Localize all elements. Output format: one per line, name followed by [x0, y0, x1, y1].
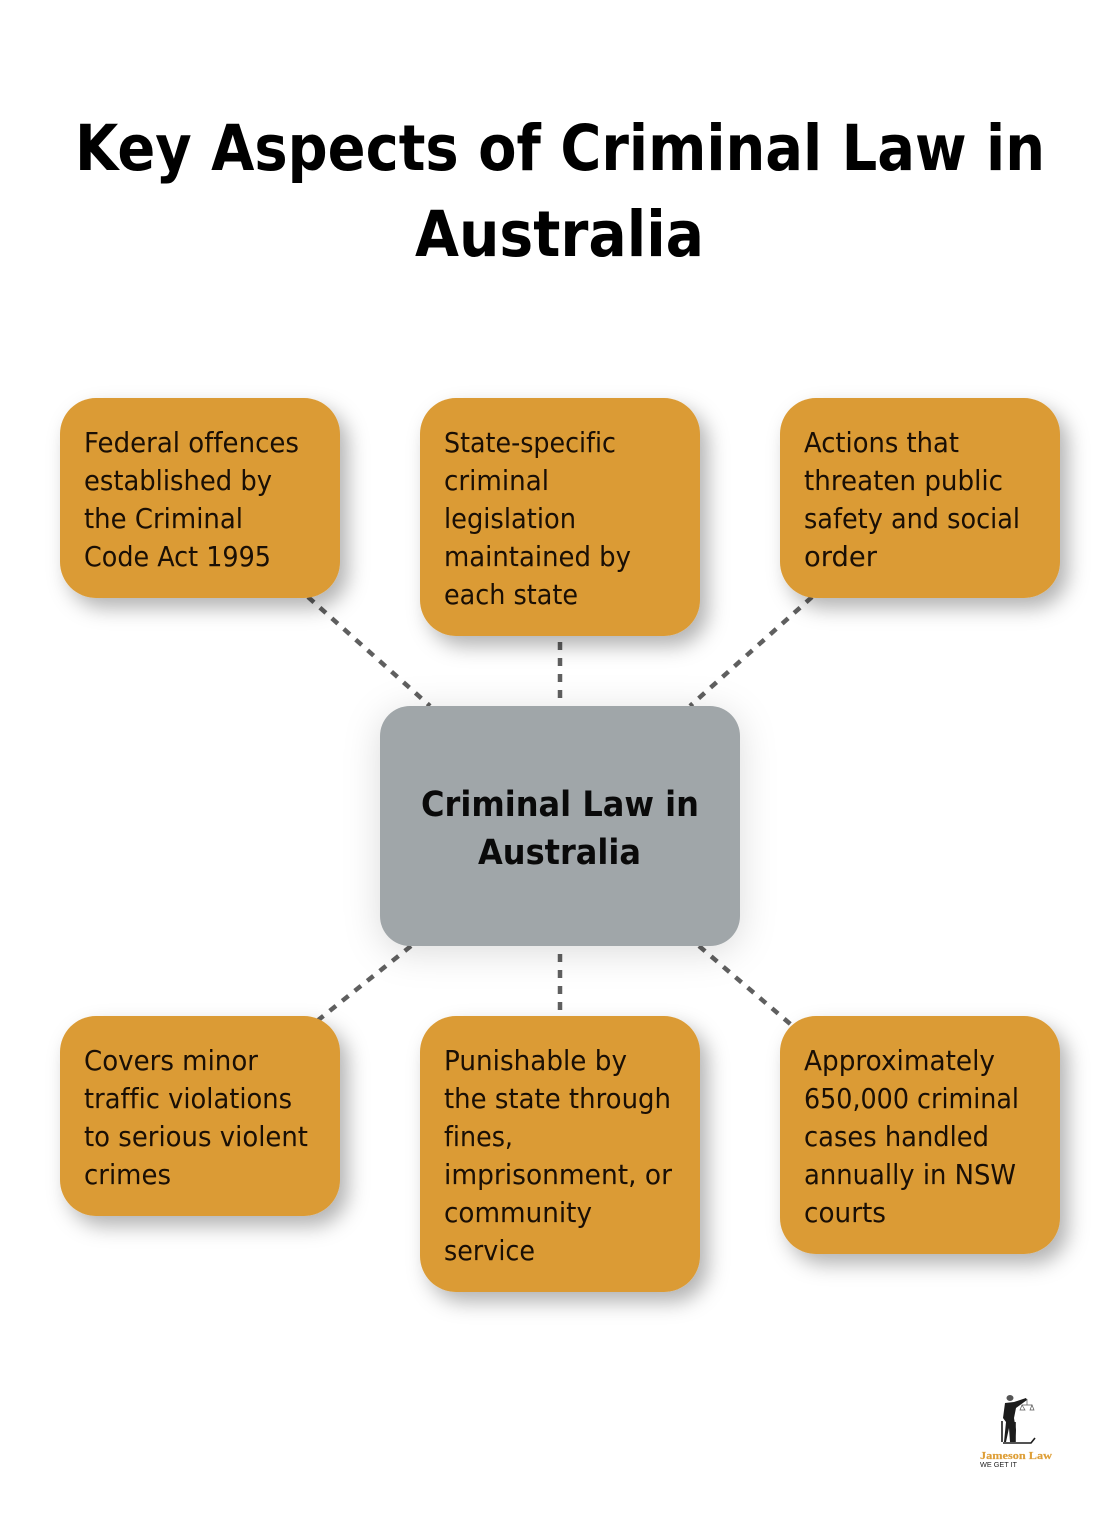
panel: centre topic [380, 706, 740, 946]
connector: centre to traffic violations [317, 946, 411, 1021]
panel: punishable: community [444, 1197, 592, 1229]
title [75, 112, 1045, 271]
connector: federal offences to centre [308, 597, 430, 706]
logo: Jameson Law: WE GET IT [980, 1462, 1018, 1469]
panel: public safety [780, 398, 1060, 598]
panel: state legislation: each state [444, 579, 578, 611]
panel: annual cases: courts [804, 1197, 886, 1229]
connector: state legislation to centre [558, 642, 562, 698]
panel: federal offences: established by [84, 465, 272, 497]
panel: traffic violations: to serious violent [84, 1121, 308, 1153]
panel: centre topic: Criminal Law in [421, 785, 699, 825]
title: Australia [415, 198, 704, 271]
panel: state legislation [420, 398, 700, 636]
panel: state legislation: criminal [444, 465, 549, 497]
panel: state legislation: State-specific [444, 427, 616, 459]
panel: annual cases: cases handled [804, 1121, 989, 1153]
panel: state legislation: legislation [444, 503, 576, 535]
panel: annual cases: 650,000 criminal [804, 1083, 1019, 1115]
panel: public safety: order [804, 541, 878, 573]
connector: centre to annual cases [699, 946, 795, 1028]
panel: public safety: threaten public [804, 465, 1003, 497]
panel: public safety: Actions that [804, 427, 959, 459]
logo: Jameson Law [980, 1395, 1052, 1469]
panel: annual cases: Approximately [804, 1045, 995, 1077]
panel: federal offences: Federal offences [84, 427, 299, 459]
panel: traffic violations: traffic violations [84, 1083, 292, 1115]
logo: Jameson Law: Jameson Law [980, 1450, 1052, 1462]
panel: traffic violations [60, 1016, 340, 1216]
panel: punishable [420, 1016, 700, 1292]
panel: federal offences: the Criminal [84, 503, 243, 535]
panel: traffic violations: Covers minor [84, 1045, 259, 1077]
panel: punishable: fines, [444, 1121, 513, 1153]
panel: federal offences: Code Act 1995 [84, 541, 271, 573]
panel: centre topic: Australia [478, 833, 641, 873]
connector: centre to punishable [558, 954, 562, 1010]
panel: punishable: imprisonment, or [444, 1159, 673, 1191]
panel: punishable: Punishable by [444, 1045, 627, 1077]
panel: state legislation: maintained by [444, 541, 631, 573]
panel: punishable: service [444, 1235, 535, 1267]
panel: public safety: safety and social [804, 503, 1020, 535]
panel: annual cases: annually in NSW [804, 1159, 1016, 1191]
panel: traffic violations: crimes [84, 1159, 171, 1191]
panel: federal offences [60, 398, 340, 598]
icon: justice figure with scales and L [1002, 1395, 1035, 1443]
connector: public safety to centre [690, 597, 812, 706]
panel: annual cases [780, 1016, 1060, 1254]
panel: punishable: the state through [444, 1083, 671, 1115]
